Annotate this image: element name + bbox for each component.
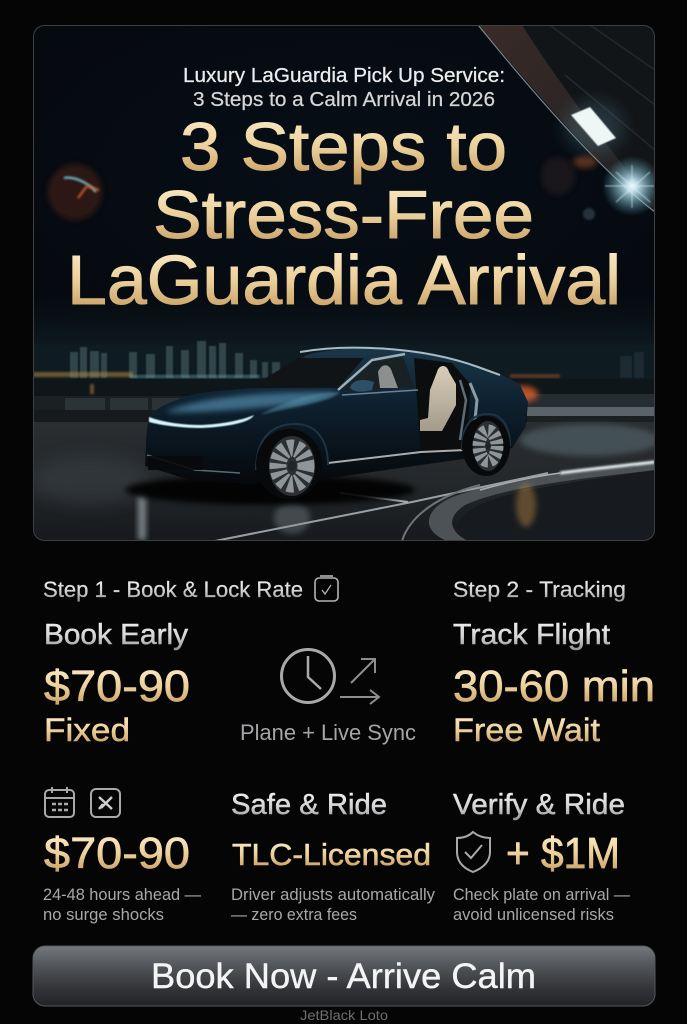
city skyline xyxy=(33,341,655,397)
fixed price card: $70-90 xyxy=(44,829,190,878)
hero subtitle: 3 Steps to a Calm Arrival in 2026 xyxy=(193,88,495,111)
verify ride card xyxy=(453,789,630,924)
headlight strip xyxy=(149,415,254,428)
guard rail xyxy=(34,394,654,422)
fixed price card: no surge shocks xyxy=(43,905,164,924)
windshield xyxy=(250,358,364,388)
wet ground xyxy=(30,422,660,541)
verify ride card: Verify & Ride xyxy=(453,789,625,821)
icon: plane badge xyxy=(91,789,120,817)
hero subtitle xyxy=(183,64,505,111)
footer brand: JetBlack Loto xyxy=(300,1007,388,1023)
wheel arches xyxy=(256,414,510,470)
step 2 heading: Step 2 - Tracking xyxy=(453,577,626,602)
hero subtitle: Luxury LaGuardia Pick Up Service: xyxy=(183,64,505,87)
icon: calendar xyxy=(45,787,74,817)
lens flare xyxy=(541,156,662,220)
verify ride card: Check plate on arrival — xyxy=(453,885,630,904)
rear wheel xyxy=(462,416,510,476)
step 2 column: Free Wait xyxy=(453,712,600,748)
safe ride card: TLC-Licensed xyxy=(232,837,431,872)
step 1 column: Book Early xyxy=(44,619,189,651)
call to action button: Book Now - Arrive Calm xyxy=(151,957,536,996)
step 1 column xyxy=(44,619,190,748)
step 1 column: Fixed xyxy=(44,712,130,748)
bumper xyxy=(147,455,240,473)
hero title xyxy=(67,109,621,319)
safe ride card: Driver adjusts automatically xyxy=(231,885,435,904)
safe ride card: — zero extra fees xyxy=(231,905,357,924)
front seat xyxy=(378,365,398,388)
hero title: 3 Steps to xyxy=(180,109,507,185)
step 1 heading: Step 1 - Book & Lock Rate xyxy=(43,577,303,602)
car body xyxy=(145,348,528,484)
open door interior xyxy=(414,358,471,456)
hero title: Stress-Free xyxy=(153,177,534,253)
safe ride card xyxy=(231,789,435,924)
icon: shield check xyxy=(457,832,490,872)
hero panel xyxy=(30,25,662,541)
car xyxy=(145,348,528,499)
icon: clock with sync arrows xyxy=(282,650,379,704)
hero title: LaGuardia Arrival xyxy=(67,241,621,319)
orb flare xyxy=(48,164,102,220)
safe ride card: Safe & Ride xyxy=(231,789,387,821)
rear light glow xyxy=(508,386,538,402)
fixed price card: 24-48 hours ahead — xyxy=(43,885,201,904)
car shadow xyxy=(125,475,415,505)
step 2 column: 30-60 min xyxy=(453,662,655,711)
hood sheen xyxy=(165,392,338,412)
step 2 column: Track Flight xyxy=(453,619,610,651)
sync caption: Plane + Live Sync xyxy=(240,720,416,745)
step 1 column: $70-90 xyxy=(44,662,190,711)
call to action button xyxy=(33,946,655,1006)
icon: clipboard check xyxy=(315,576,338,601)
terminal ceiling xyxy=(478,25,655,212)
verify ride card: + $1M xyxy=(506,829,620,878)
verify ride card: avoid unlicensed risks xyxy=(453,905,614,924)
rear seat xyxy=(420,366,456,431)
mirror xyxy=(350,380,374,392)
fixed price card xyxy=(43,829,201,924)
step 2 column xyxy=(453,619,655,748)
front wheel xyxy=(256,429,322,499)
